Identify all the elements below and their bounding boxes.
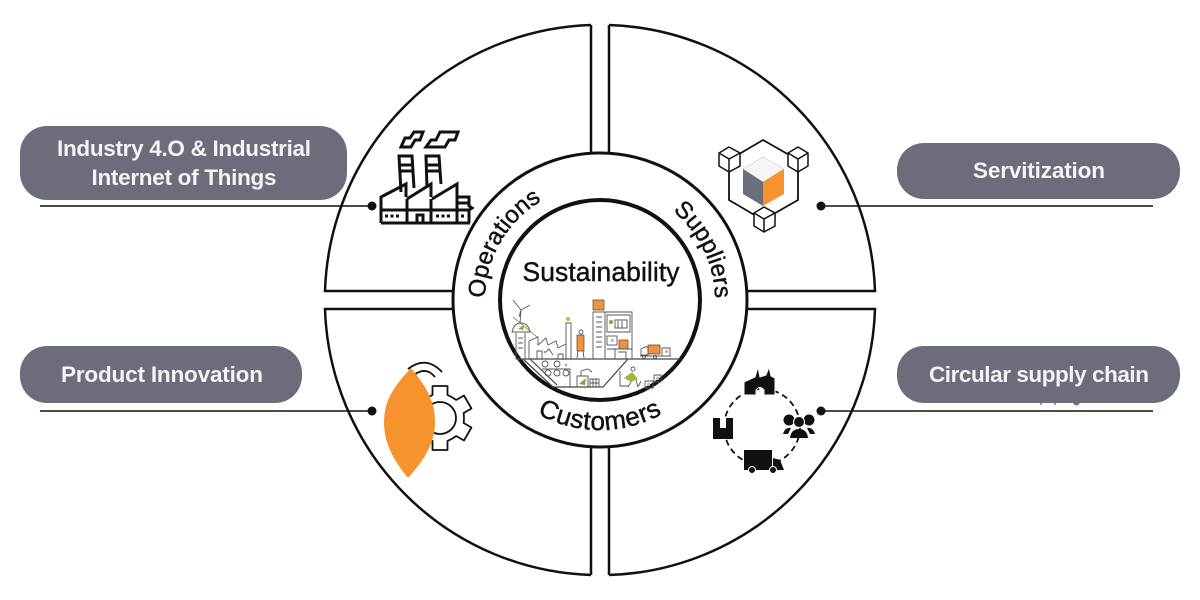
label: Product Innovation: Product Innovation xyxy=(61,362,263,387)
label: Servitization: Servitization xyxy=(973,158,1105,183)
heading: Sustainability: Sustainability xyxy=(522,257,680,287)
icon: connected gear xyxy=(384,363,474,478)
panel: suppliers quadrant xyxy=(609,25,875,291)
icon: hexagon cubes xyxy=(719,140,808,232)
ring label: Customers: Customers xyxy=(540,400,660,430)
icon: factory xyxy=(381,132,472,223)
leftover orange marks under pill xyxy=(1040,403,1080,406)
inner ring xyxy=(500,200,700,400)
panel: operations quadrant xyxy=(325,25,591,291)
ring label: Suppliers: Suppliers xyxy=(675,201,728,298)
label: Industry 4.O & Industrial Internet of Things: Internet of Things xyxy=(92,165,276,190)
panel: product quadrant xyxy=(325,309,591,575)
label: Product Innovation xyxy=(20,346,302,403)
connector: Product Innovation xyxy=(40,406,376,416)
label: Circular supply chain: Circular supply chain xyxy=(929,362,1149,387)
label: Circular supply chain xyxy=(897,346,1180,403)
panel: customers quadrant xyxy=(609,309,875,575)
label: Servitization xyxy=(897,143,1180,199)
illustration: sustainable factory scene xyxy=(512,300,680,388)
ring label: Operations: Operations xyxy=(468,192,540,296)
connector: Industry 4.0 xyxy=(40,202,376,210)
connector: Servitization xyxy=(816,202,1153,210)
middle ring xyxy=(453,153,747,447)
label: Industry 4.O & Industrial Internet of Things: Industry 4.O & Industrial xyxy=(57,136,311,161)
connector: Circular supply chain xyxy=(816,406,1153,416)
icon: circular supply chain xyxy=(713,367,815,474)
label: Industry 4.O & Industrial Internet of Things xyxy=(20,126,347,200)
